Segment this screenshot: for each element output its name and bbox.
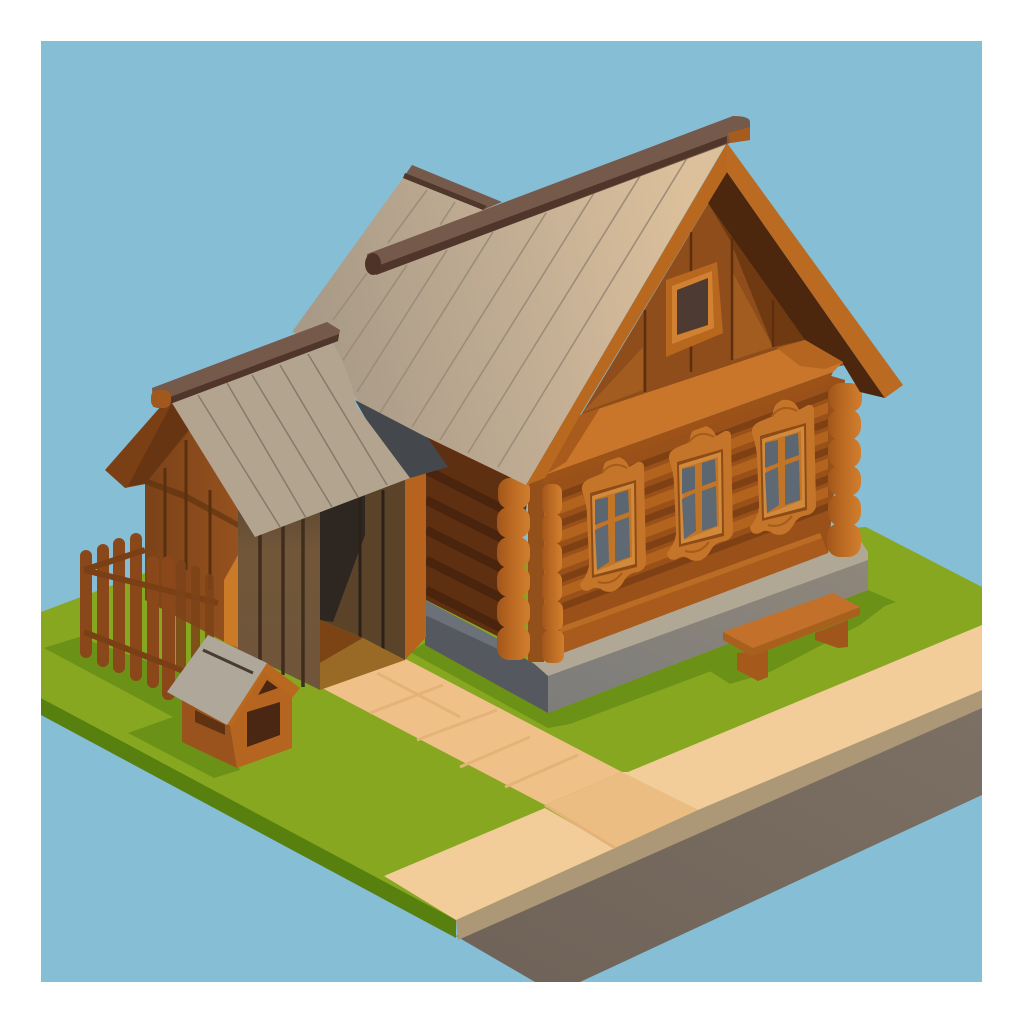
gable mid shadow [708,203,805,347]
annex roof [151,322,410,537]
window 2 [667,426,733,561]
annex front boards [238,490,320,690]
doghouse window [195,710,225,735]
main log wall [530,375,845,660]
stone path [322,655,698,848]
main ridge beam [365,116,750,275]
annex wall highlight [224,555,238,648]
main house left wall [426,430,530,640]
foundation top ledge [530,540,868,676]
sidewalk left [384,808,615,920]
window 3 [750,400,816,535]
sidewalk right [620,625,982,810]
foundation front face [548,556,868,713]
doghouse door [247,702,280,747]
annex gable rake [105,403,190,488]
roof junction shadow [355,400,448,478]
path crossing [545,772,698,848]
gable [526,143,903,485]
main roof [292,142,727,485]
window 1 [580,457,646,592]
doghouse side [182,700,237,768]
foundation [425,540,868,713]
windows [580,400,816,592]
corner logs front [528,484,564,663]
fence rails [84,550,218,672]
rear ridge beam [403,165,502,210]
doghouse gable [258,680,278,695]
opening dark shade [320,490,365,622]
faded posts [176,560,214,670]
base plank [560,533,828,653]
corner logs right [827,383,862,557]
gable window [666,262,723,357]
fence [80,533,218,700]
horizontal logs [540,394,830,615]
annex opening [320,470,405,690]
gable boards [645,232,773,392]
bench front leg [737,650,768,681]
grass lawn [41,527,982,920]
annex left wall [145,410,255,650]
gable lit boards [733,273,773,360]
grass edge [41,698,456,938]
opening floor [320,620,363,663]
gable deep shadow [708,172,885,398]
roof seams [333,158,687,467]
corner logs left [497,478,530,660]
road embankment [456,704,982,982]
ground shadows [44,590,896,778]
sidewalk side [456,688,982,940]
doghouse roof [167,635,267,725]
bench rear leg [815,620,848,648]
doghouse [167,635,300,768]
annex ridge beam [151,322,340,408]
bench [723,593,860,681]
annex roof seams [198,354,387,527]
doghouse front [230,663,292,768]
left rake [526,143,727,485]
doghouse trim [226,663,300,726]
cornice [543,340,843,484]
bench top [723,593,860,648]
bench edge [723,607,860,656]
annex post [405,465,426,660]
right rake [727,143,903,398]
